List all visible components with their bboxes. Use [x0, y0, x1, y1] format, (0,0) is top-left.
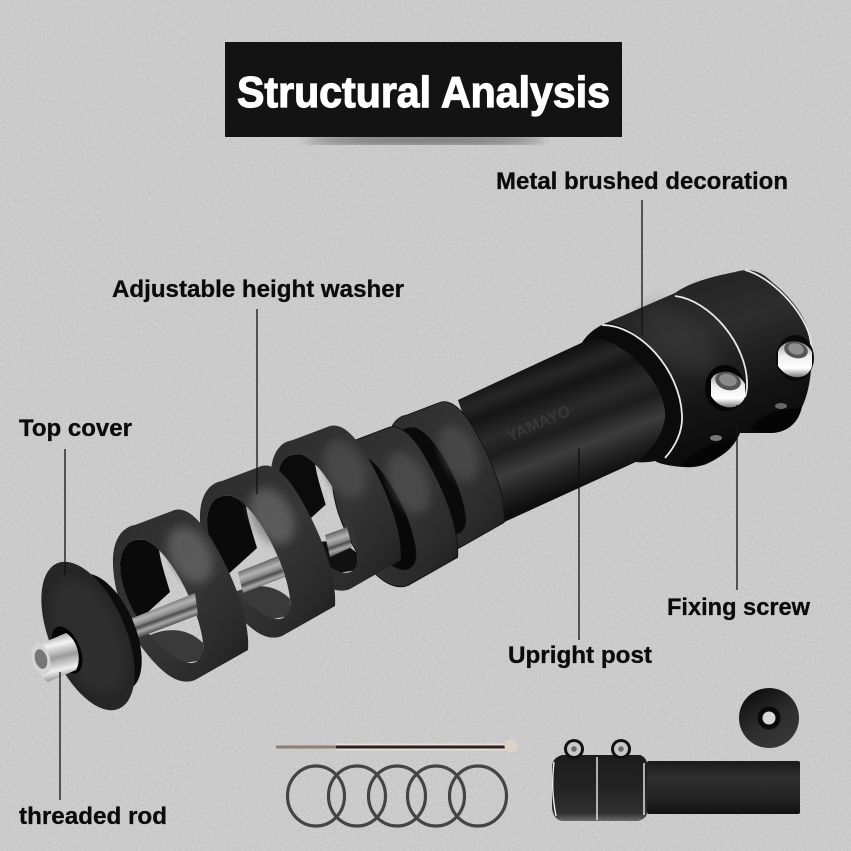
- label: Fixing screw: Fixing screw: [667, 594, 810, 621]
- washer 5: [380, 402, 504, 550]
- washer 2: [200, 466, 335, 638]
- screw 1: [705, 365, 745, 411]
- threaded rod bolt head: [28, 633, 79, 682]
- main exploded stem assembly: [22, 270, 814, 724]
- top cover: [22, 548, 157, 724]
- metal brushed decoration rings: [602, 270, 811, 458]
- accessory: top cap: [739, 688, 799, 748]
- label: Upright post: Upright post: [508, 642, 652, 669]
- label: threaded rod: threaded rod: [19, 803, 167, 830]
- accessory: O-rings: [288, 766, 506, 826]
- title banner: Structural Analysis: [237, 68, 610, 117]
- label: Top cover: Top cover: [19, 415, 132, 442]
- washer 4: [323, 427, 458, 587]
- fixing screws: [705, 335, 814, 411]
- screw 2: [776, 335, 814, 381]
- label: Adjustable height washer: Adjustable height washer: [112, 276, 404, 303]
- upright post: [458, 338, 665, 524]
- upright post: YAMAYO: [505, 403, 573, 446]
- washer 3: [271, 425, 401, 591]
- title banner: [225, 42, 622, 144]
- threaded rod shaft: [125, 527, 352, 641]
- accessory: assembled stem side view: [552, 739, 800, 821]
- washer 1: [113, 510, 248, 682]
- label: Metal brushed decoration: Metal brushed decoration: [496, 168, 788, 195]
- accessory: long threaded rod: [276, 740, 518, 752]
- stem clamp body: [578, 270, 812, 467]
